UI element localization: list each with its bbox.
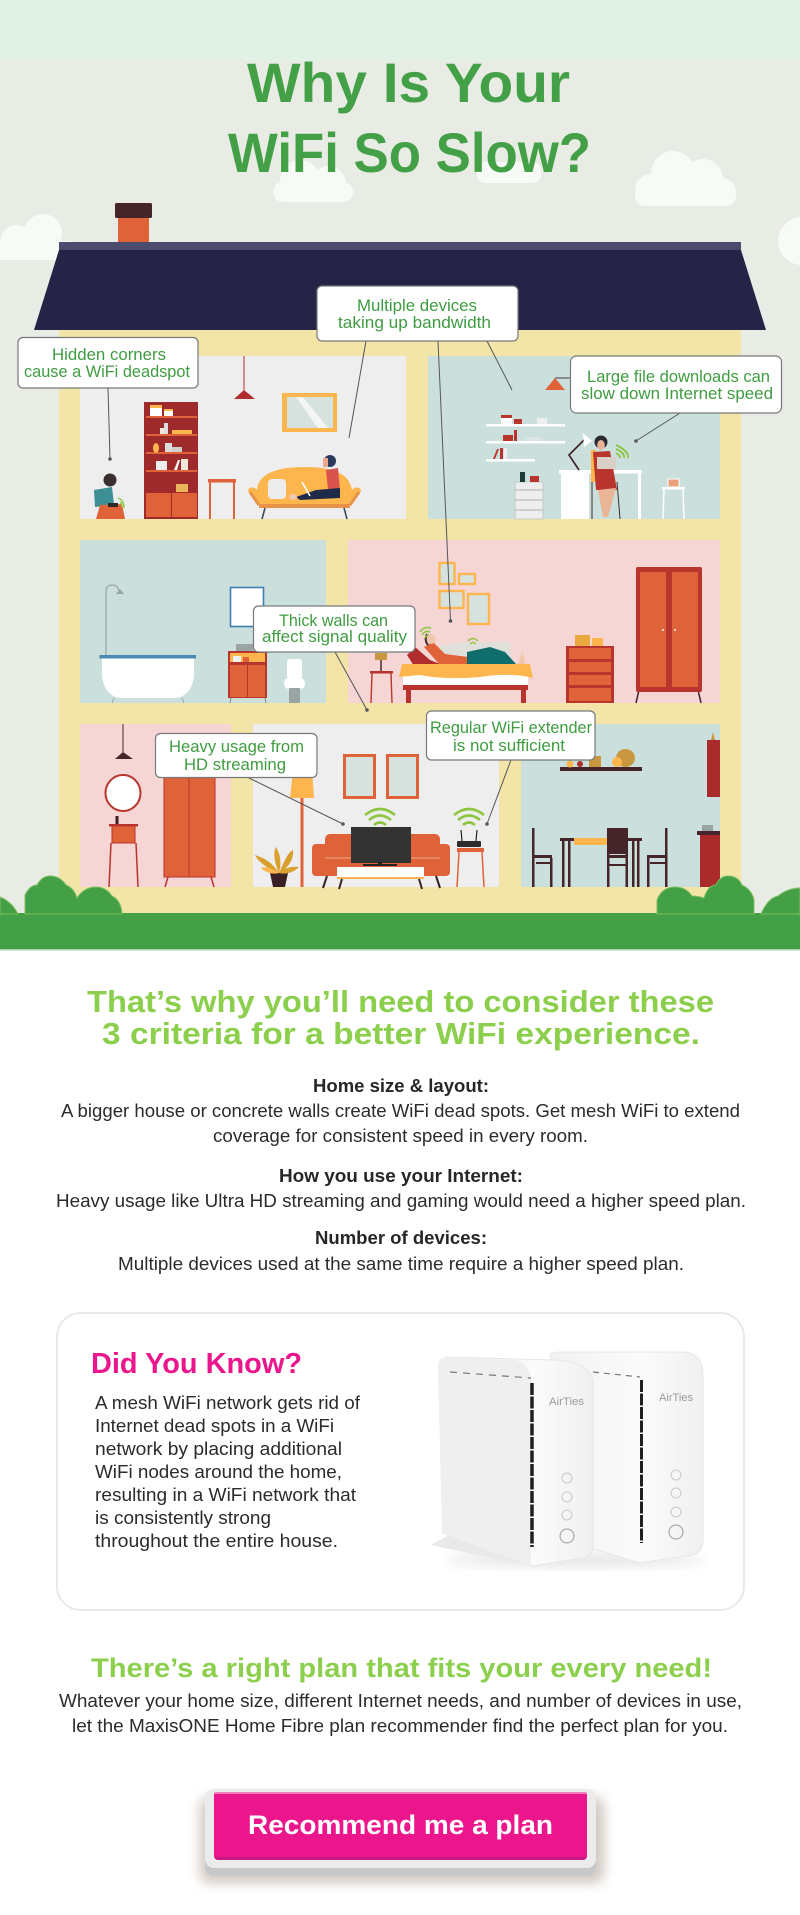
wall shelves bbox=[486, 415, 565, 462]
bookshelf bbox=[144, 402, 198, 519]
clouds bbox=[0, 151, 800, 265]
picture frame bbox=[282, 393, 337, 432]
callout: hidden corners bbox=[18, 338, 198, 388]
potted plant bbox=[255, 847, 299, 887]
text block: home size and layout: A bigger house or concrete walls create WiFi dead spots. Get mesh WiFi to extend bbox=[61, 1101, 740, 1121]
wifi signals on bed bbox=[420, 628, 478, 644]
boy with tablet bbox=[94, 474, 125, 519]
front node: AirTies bbox=[549, 1396, 585, 1408]
callout: multiple devices: taking up bandwidth bbox=[338, 314, 491, 332]
wall shelf with items bbox=[560, 749, 642, 771]
shower bbox=[106, 585, 124, 655]
leader line: large file bbox=[634, 413, 680, 443]
room: dining bbox=[521, 724, 720, 887]
room: bedroom bbox=[348, 540, 720, 703]
room: home office bbox=[428, 356, 720, 519]
bushes left bbox=[0, 876, 122, 914]
chimney bbox=[115, 203, 152, 242]
dining table bbox=[560, 838, 642, 887]
bathtub bbox=[100, 655, 196, 703]
text block: number of devices: Number of devices: bbox=[315, 1228, 487, 1248]
title: Why Is Your bbox=[247, 51, 570, 114]
leader line: devices to sofa bbox=[349, 341, 366, 438]
drawer unit bbox=[515, 472, 543, 519]
picture frames bbox=[440, 563, 489, 624]
ground bbox=[0, 913, 800, 950]
product: AirTies mesh nodes bbox=[431, 1352, 705, 1566]
callout: large file downloads: Large file downloads can bbox=[587, 368, 770, 386]
dining chairs bbox=[532, 828, 668, 887]
wifi signal: extender bbox=[454, 809, 484, 825]
sofa bbox=[248, 467, 361, 519]
television bbox=[351, 827, 411, 866]
text block: internet use: How you use your Internet: bbox=[279, 1166, 523, 1186]
paragraph: mesh wifi: is consistently strong bbox=[95, 1508, 271, 1528]
stool bbox=[208, 479, 236, 519]
hall table bbox=[109, 816, 138, 887]
pendant lamp bbox=[115, 724, 133, 759]
sideboard bbox=[697, 825, 720, 887]
pendant lamp bbox=[234, 356, 255, 399]
paragraph: mesh wifi bbox=[95, 1393, 361, 1551]
leader line: devices to office bbox=[487, 341, 512, 390]
leader line: streaming bbox=[247, 777, 345, 826]
side table bbox=[662, 479, 685, 519]
callout: multiple devices: Multiple devices bbox=[357, 297, 477, 315]
text block: internet use bbox=[56, 1166, 746, 1211]
paragraph: mesh wifi: throughout the entire house. bbox=[95, 1531, 338, 1551]
room: TV lounge bbox=[253, 724, 499, 889]
panel: did you know bbox=[57, 1313, 744, 1610]
coffee table bbox=[337, 867, 424, 889]
bathroom cabinet bbox=[228, 644, 267, 703]
round mirror bbox=[106, 775, 140, 811]
button: recommend me a plan bbox=[200, 1789, 604, 1883]
floor lamp bbox=[290, 770, 314, 887]
leader line: thick walls bbox=[335, 652, 369, 712]
callout: large file downloads: slow down Internet speed bbox=[581, 385, 773, 403]
text block: plan recommender bbox=[59, 1691, 742, 1736]
text block: number of devices bbox=[118, 1228, 684, 1274]
wardrobe bbox=[636, 567, 702, 703]
bed with person bbox=[399, 634, 533, 703]
sky background bbox=[0, 61, 800, 921]
desk lamp bbox=[569, 433, 592, 470]
leader line: extender bbox=[485, 760, 511, 826]
callout: regular extender: is not sufficient bbox=[453, 737, 565, 755]
callout: thick walls: affect signal quality bbox=[262, 628, 408, 646]
nightstand and lamp bbox=[370, 653, 393, 703]
heading: did you know: Did You Know? bbox=[91, 1348, 302, 1380]
callout: heavy usage bbox=[156, 734, 317, 778]
text block: home size and layout: coverage for consistent speed in every room. bbox=[213, 1126, 588, 1146]
button: recommend me a plan: Recommend me a plan bbox=[248, 1810, 553, 1840]
heading: three criteria: That’s why you’ll need to consider these bbox=[87, 984, 714, 1019]
woman at desk with laptop bbox=[591, 436, 620, 519]
red curtain bbox=[707, 732, 720, 797]
front node bbox=[431, 1357, 593, 1566]
wall mirror bbox=[230, 588, 264, 626]
room: bathroom bbox=[80, 540, 326, 703]
heading: three criteria bbox=[87, 984, 714, 1051]
callout: thick walls: Thick walls can bbox=[279, 612, 388, 630]
wall frames bbox=[344, 756, 418, 798]
callout: regular extender bbox=[426, 711, 595, 760]
text block: number of devices: Multiple devices used at the same time require a higher speed plan. bbox=[118, 1254, 684, 1274]
paragraph: mesh wifi: Internet dead spots in a WiFi bbox=[95, 1416, 334, 1436]
paragraph: mesh wifi: A mesh WiFi network gets rid of bbox=[95, 1393, 361, 1413]
paragraph: mesh wifi: network by placing additional bbox=[95, 1439, 342, 1459]
text block: internet use: Heavy usage like Ultra HD streaming and gaming would need a higher speed plan. bbox=[56, 1191, 746, 1211]
roof bbox=[34, 242, 766, 330]
text block: home size and layout bbox=[61, 1076, 740, 1146]
heading: three criteria: 3 criteria for a better WiFi experience. bbox=[102, 1016, 700, 1051]
paragraph: mesh wifi: WiFi nodes around the home, bbox=[95, 1462, 342, 1482]
callout: heavy usage: Heavy usage from bbox=[169, 738, 304, 756]
title: WiFi So Slow? bbox=[228, 121, 591, 184]
top band bbox=[0, 0, 800, 61]
sofa bbox=[312, 834, 450, 888]
house walls bbox=[59, 330, 741, 920]
room: hallway bbox=[80, 724, 231, 887]
leader line: devices to bed bbox=[438, 341, 452, 623]
text block: plan recommender: let the MaxisONE Home Fibre plan recommender find the perfect plan for you. bbox=[72, 1716, 728, 1736]
title bbox=[228, 51, 591, 184]
wall lamp bbox=[545, 378, 571, 390]
back node bbox=[550, 1352, 703, 1563]
text block: home size and layout: Home size & layout: bbox=[313, 1076, 489, 1096]
desk bbox=[559, 470, 642, 519]
back node: AirTies bbox=[659, 1392, 693, 1404]
chest of drawers bbox=[566, 635, 614, 703]
text block: plan recommender: Whatever your home size, different Internet needs, and number of devices in use, bbox=[59, 1691, 742, 1711]
toilet bbox=[284, 659, 305, 703]
bushes right bbox=[657, 876, 800, 914]
callout: regular extender: Regular WiFi extender bbox=[430, 719, 592, 737]
room: living room top floor bbox=[80, 356, 406, 519]
heading: right plan: There’s a right plan that fits your every need! bbox=[91, 1653, 712, 1683]
callout: multiple devices bbox=[317, 286, 518, 341]
woman on sofa with laptop bbox=[289, 455, 340, 500]
callout: large file downloads bbox=[570, 356, 782, 413]
leader line: hidden corners bbox=[108, 388, 112, 461]
callout: hidden corners: Hidden corners bbox=[52, 346, 166, 364]
callout: heavy usage: HD streaming bbox=[184, 756, 286, 774]
callout: hidden corners: cause a WiFi deadspot bbox=[24, 363, 190, 381]
wardrobe bbox=[164, 770, 215, 887]
callout: thick walls bbox=[254, 606, 415, 652]
router on table bbox=[457, 830, 484, 887]
wifi signal: tv bbox=[365, 809, 395, 825]
wifi signal bbox=[616, 445, 628, 458]
paragraph: mesh wifi: resulting in a WiFi network that bbox=[95, 1485, 356, 1505]
